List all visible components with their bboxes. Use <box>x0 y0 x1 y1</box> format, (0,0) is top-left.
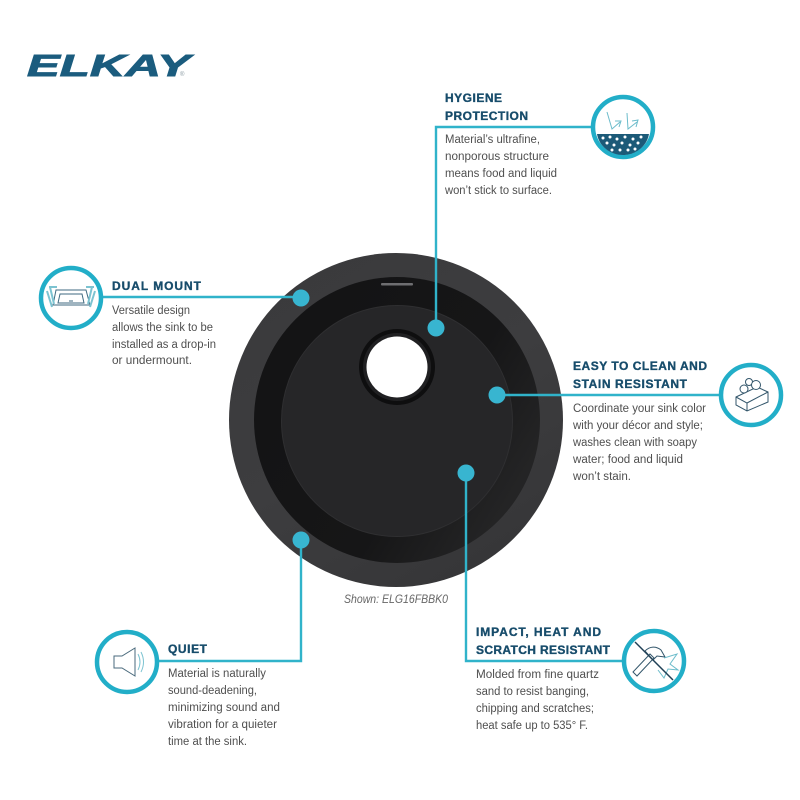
icon: no hammer impact <box>624 631 684 691</box>
heading: easy to clean: EASY TO CLEAN AND <box>573 359 707 373</box>
heading: impact resistant: IMPACT, HEAT AND <box>476 625 601 639</box>
text: hygiene protection <box>444 134 557 197</box>
panel: impact heat and scratch resistant <box>476 625 684 732</box>
logo: Elkay: ELKAY <box>27 48 195 83</box>
text: easy to clean: won’t stain. <box>572 471 631 483</box>
heading: dual mount: DUAL MOUNT <box>112 279 202 293</box>
text: dual mount <box>112 305 216 367</box>
panel: hygiene protection <box>444 91 653 197</box>
text: impact resistant: heat safe up to 535° F. <box>476 720 588 732</box>
text: easy to clean <box>572 403 706 483</box>
text: dual mount: installed as a drop-in <box>112 339 216 351</box>
heading: hygiene protection: PROTECTION <box>445 109 528 123</box>
heading: impact resistant <box>476 625 611 657</box>
logo: Elkay <box>27 48 195 83</box>
text: dual mount: or undermount. <box>112 355 192 367</box>
connector: hygiene protection <box>436 127 600 328</box>
text: hygiene protection: means food and liquid <box>445 168 557 180</box>
text: easy to clean: washes clean with soapy <box>572 437 697 449</box>
panel: dual mount <box>41 268 216 367</box>
heading: quiet: QUIET <box>168 642 208 656</box>
text: quiet: vibration for a quieter <box>168 719 277 731</box>
connector: quiet <box>155 540 301 661</box>
connector: impact resistant <box>466 473 630 661</box>
panel: quiet <box>97 632 280 748</box>
text: impact resistant <box>476 669 599 732</box>
heading: hygiene protection: HYGIENE <box>445 91 502 105</box>
connector: dual mount <box>100 296 301 298</box>
logo: Elkay: ® <box>180 71 185 78</box>
icon: hygiene surface <box>593 97 653 157</box>
text: impact resistant: chipping and scratches; <box>476 703 594 715</box>
heading: impact resistant: SCRATCH RESISTANT <box>476 643 611 657</box>
text: impact resistant: Molded from fine quartz <box>476 669 599 681</box>
panel: easy to clean <box>572 359 781 483</box>
text: quiet: sound-deadening, <box>168 685 257 697</box>
sink product image <box>229 253 563 587</box>
heading: hygiene protection <box>445 91 528 123</box>
text: hygiene protection: nonporous structure <box>445 151 549 163</box>
caption: Shown: ELG16FBBK0 <box>344 594 449 606</box>
heading: easy to clean <box>573 359 707 391</box>
marker dots <box>292 290 506 548</box>
text: hygiene protection: won’t stick to surface. <box>444 185 552 197</box>
text: easy to clean: Coordinate your sink color <box>573 403 706 415</box>
text: quiet <box>168 668 280 748</box>
connector: easy to clean <box>497 394 725 396</box>
text: quiet: minimizing sound and <box>168 702 280 714</box>
icon: sink mount <box>41 268 101 328</box>
text: quiet: Material is naturally <box>168 668 266 680</box>
text: hygiene protection: Material’s ultrafine, <box>445 134 540 146</box>
heading: easy to clean: STAIN RESISTANT <box>573 377 688 391</box>
icon: soap bar <box>721 365 781 425</box>
text: easy to clean: with your décor and style; <box>572 420 703 432</box>
text: dual mount: allows the sink to be <box>112 322 213 334</box>
icon: speaker <box>97 632 157 692</box>
text: impact resistant: sand to resist banging, <box>476 686 589 698</box>
text: dual mount: Versatile design <box>112 305 190 317</box>
text: quiet: time at the sink. <box>168 736 247 748</box>
text: easy to clean: water; food and liquid <box>572 454 683 466</box>
